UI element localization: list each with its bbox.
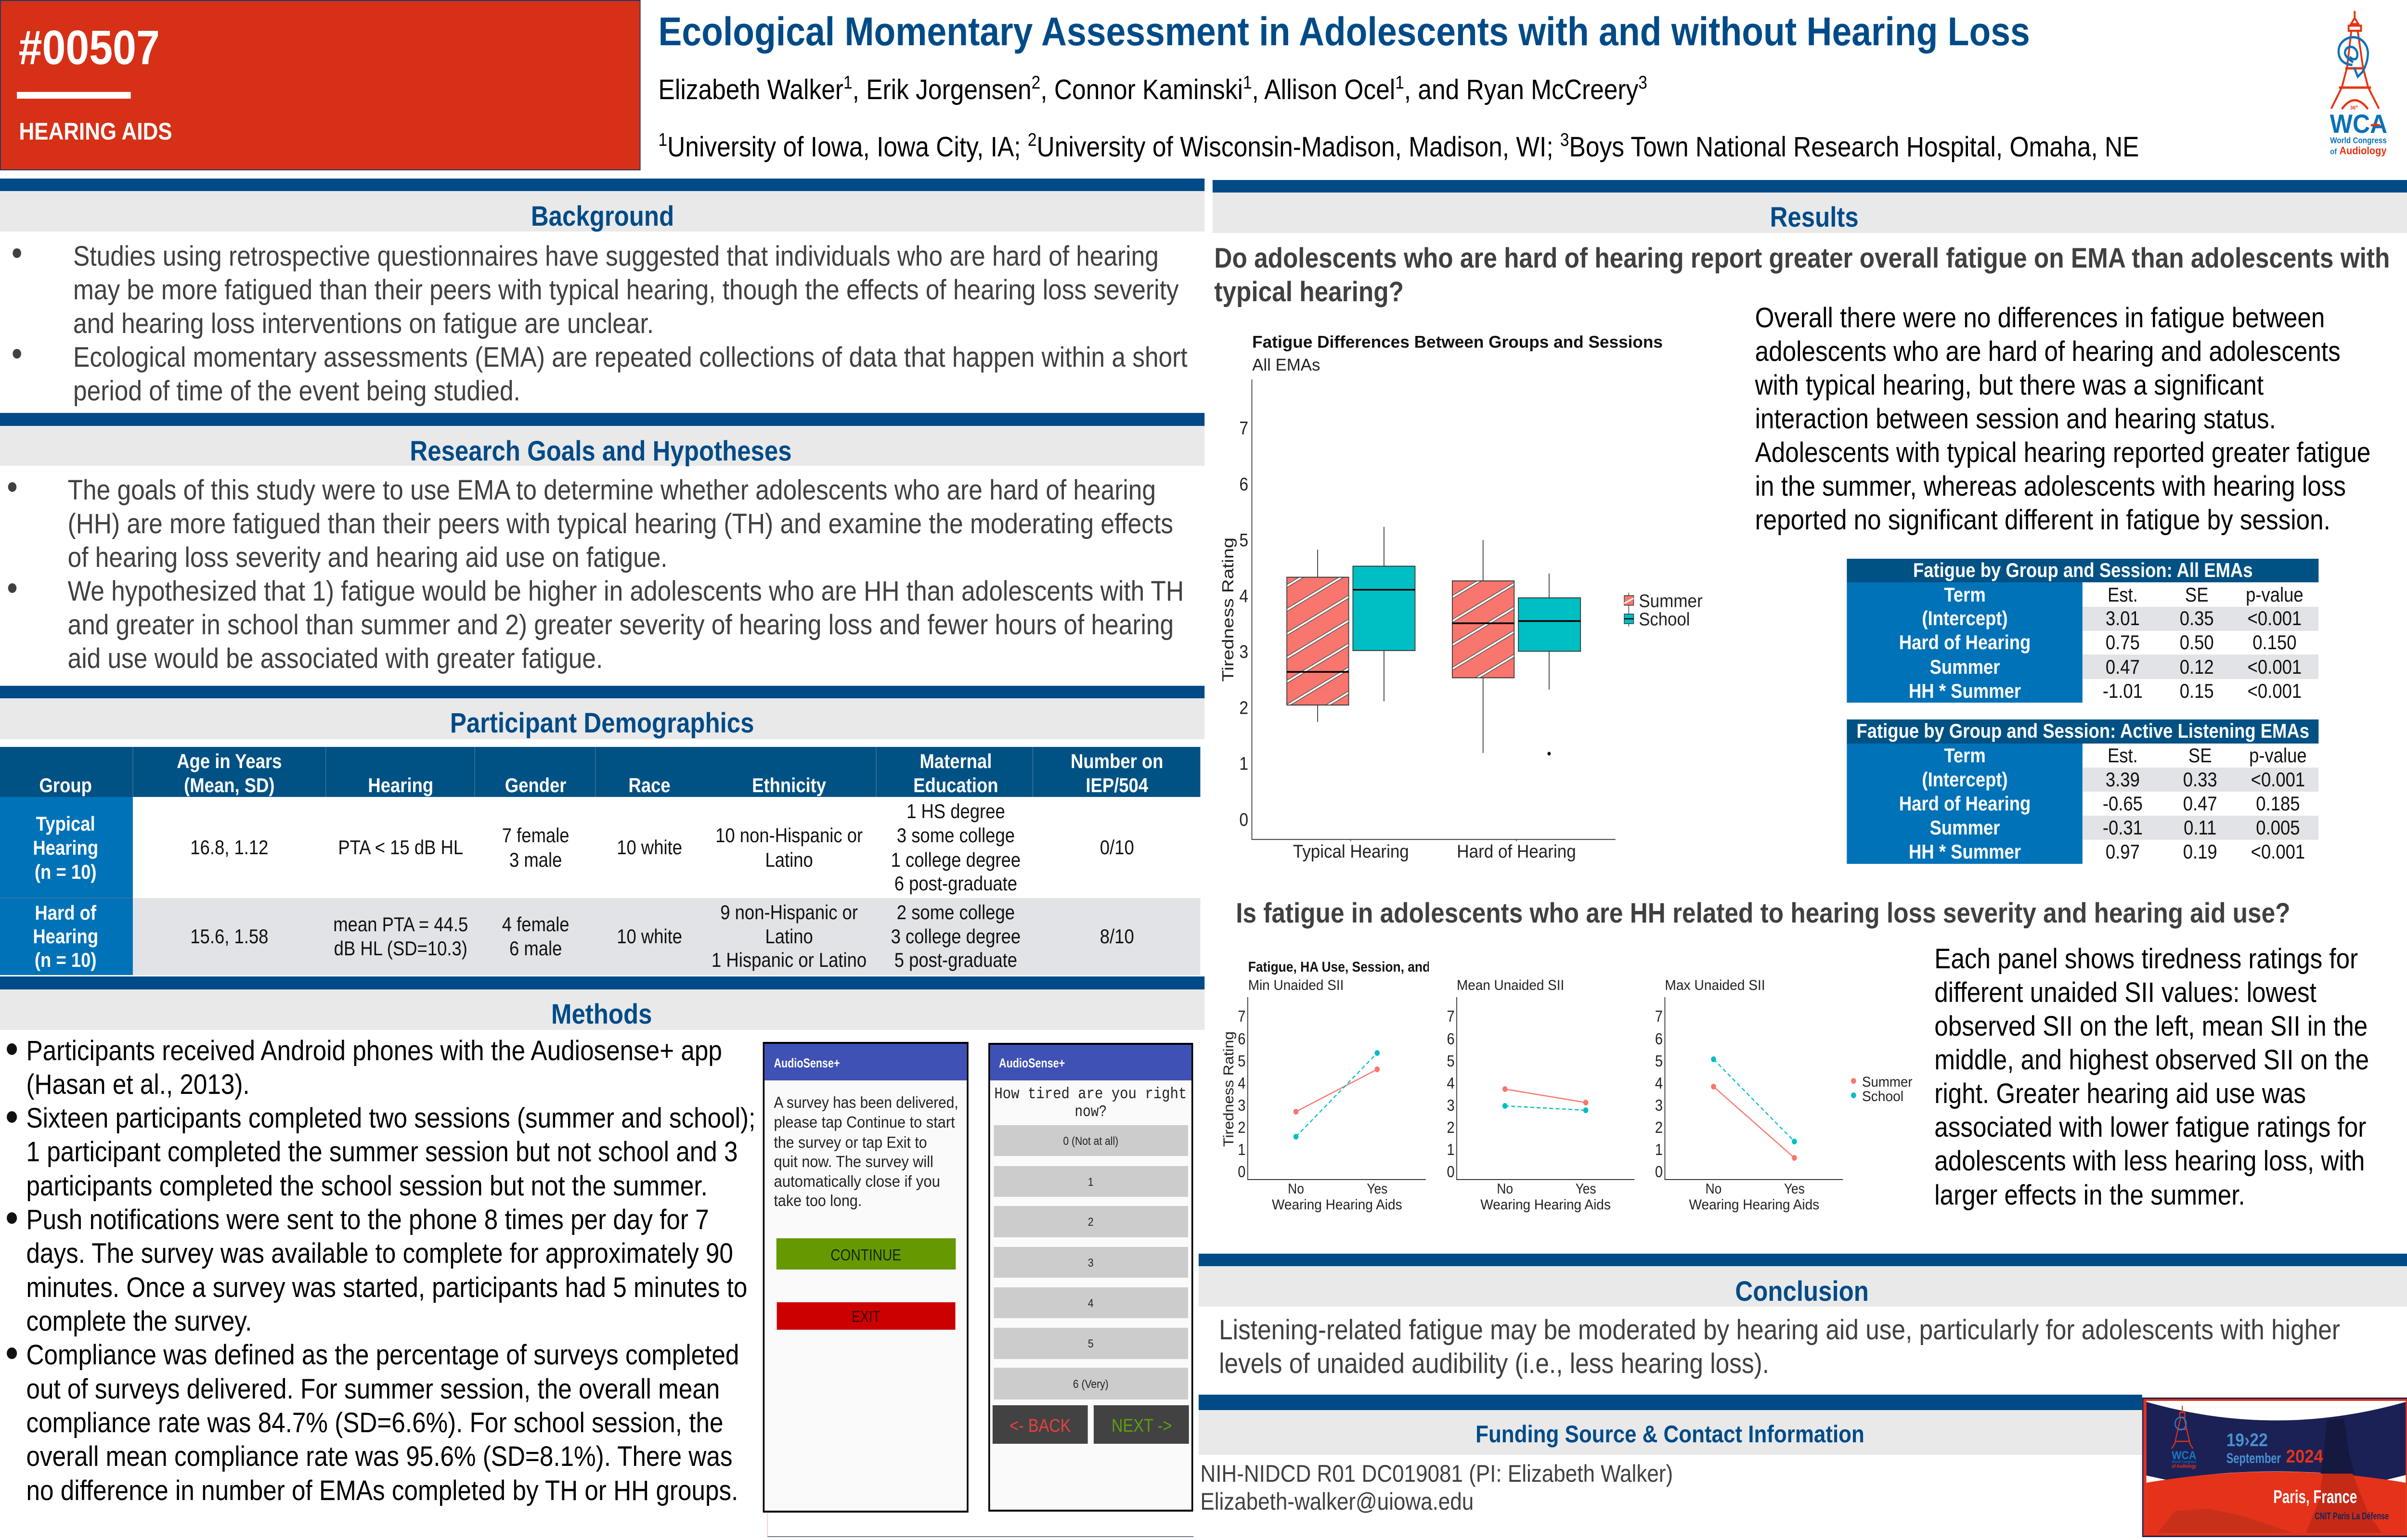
- chart: box plot of fatigue by group and session: School: [1639, 609, 1690, 629]
- phone screenshot: survey delivered: A survey has been delivered,: [774, 1093, 958, 1111]
- table: all EMAs: 0.150: [2252, 632, 2297, 654]
- question 1: typical hearing?: [1214, 276, 1404, 308]
- chart: box plot of fatigue by group and session: [1218, 333, 1703, 861]
- icon: WCA logo: th: [2355, 105, 2358, 108]
- table: demographics: Education: [913, 775, 998, 797]
- affiliations: 2: [1028, 129, 1037, 150]
- chart: fatigue by hearing aid use in three SII panels: Summer: [1862, 1073, 1913, 1090]
- funding text: [1200, 1460, 1673, 1515]
- table: active listening EMAs: 0.005: [2256, 817, 2300, 839]
- results text 2: adolescents with less hearing loss, with: [1934, 1145, 2365, 1177]
- table: all EMAs: HH * Summer: [1909, 680, 2021, 703]
- table: active listening EMAs: 0.47: [2183, 793, 2217, 815]
- table: demographics: Gender: [505, 775, 566, 797]
- table: demographics: mean PTA = 44.5: [333, 914, 468, 936]
- heading: demographics: Participant Demographics: [450, 707, 754, 739]
- methods text: 1 participant completed the summer session but not school and 3: [26, 1136, 738, 1168]
- chart: fatigue by hearing aid use in three SII panels: 7: [1447, 1007, 1455, 1025]
- chart: box plot of fatigue by group and session: 4: [1239, 585, 1248, 606]
- table: demographics: 16.8, 1.12: [190, 837, 268, 859]
- methods text: (Hasan et al., 2013).: [26, 1068, 250, 1100]
- phone screenshot: tiredness question: AudioSense+: [999, 1056, 1065, 1070]
- table: demographics: 10 white: [617, 926, 682, 948]
- methods text: [7, 1035, 755, 1506]
- table: demographics: 1 college degree: [891, 849, 1021, 872]
- chart: fatigue by hearing aid use in three SII panels: 7: [1655, 1007, 1663, 1025]
- results text 1: [1755, 302, 2370, 536]
- results text 2: associated with lower fatigue ratings for: [1934, 1111, 2366, 1143]
- chart: box plot of fatigue by group and session: All EMAs: [1252, 356, 1320, 375]
- research goals text: (HH) are more fatigued than their peers with typical hearing (TH) and examine the moderating effects: [68, 508, 1173, 539]
- heading: methods: Methods: [551, 999, 652, 1030]
- chart: fatigue by hearing aid use in three SII panels: [1220, 958, 1913, 1212]
- chart: fatigue by hearing aid use in three SII panels: 1: [1238, 1141, 1245, 1158]
- methods text: Push notifications were sent to the phone 8 times per day for 7: [26, 1204, 709, 1235]
- chart: fatigue by hearing aid use in three SII panels: 6: [1238, 1030, 1245, 1048]
- chart: fatigue by hearing aid use in three SII panels: 5: [1447, 1052, 1455, 1070]
- table: active listening EMAs: 0.97: [2106, 841, 2140, 863]
- research goals text: [8, 474, 1184, 674]
- chart: box plot of fatigue by group and session: 0: [1239, 809, 1248, 830]
- table: all EMAs: 0.75: [2106, 632, 2140, 654]
- chart: fatigue by hearing aid use in three SII panels: 4: [1447, 1074, 1455, 1092]
- background text: Ecological momentary assessments (EMA) are repeated collections of data that happen within a short: [73, 341, 1188, 373]
- table: demographics: Ethnicity: [752, 775, 826, 797]
- panel: research goals: [0, 413, 1204, 674]
- affiliations: Boys Town National Research Hospital, Omaha, NE: [1569, 131, 2139, 163]
- background text: period of time of the event being studied.: [73, 375, 520, 407]
- table: all EMAs: Fatigue by Group and Session: All EMAs: [1913, 560, 2253, 582]
- phone screenshot: tiredness question: 4: [1088, 1297, 1094, 1309]
- table: all EMAs: 0.15: [2180, 680, 2214, 703]
- chart: fatigue by hearing aid use in three SII panels: 1: [1447, 1141, 1455, 1158]
- table: all EMAs: 0.35: [2180, 608, 2214, 630]
- table: all EMAs: Summer: [1930, 656, 2000, 679]
- table: all EMAs: Term: [1944, 584, 1986, 606]
- table: active listening EMAs: 0.11: [2184, 817, 2216, 839]
- chart: fatigue by hearing aid use in three SII panels: No: [1706, 1180, 1721, 1196]
- panel: methods: [0, 976, 1204, 1506]
- table: demographics: 0/10: [1100, 837, 1134, 859]
- table: all EMAs: 0.47: [2106, 656, 2140, 679]
- authors: 1: [1395, 72, 1404, 92]
- table: demographics: 3 some college: [897, 825, 1015, 847]
- table: demographics: Latino: [765, 849, 813, 872]
- table: all EMAs: 3.01: [2106, 608, 2140, 630]
- phone screenshot: survey delivered: automatically close if you: [774, 1172, 940, 1190]
- chart: fatigue by hearing aid use in three SII panels: Wearing Hearing Aids: [1272, 1196, 1402, 1212]
- phone screenshot: tiredness question: 2: [1088, 1216, 1094, 1228]
- conclusion text: [1219, 1314, 2340, 1379]
- phone screenshot: survey delivered: the survey or tap Exit to: [774, 1133, 927, 1151]
- phone screenshot: tiredness question: 3: [1088, 1257, 1094, 1269]
- research goals text: and greater in school than summer and 2) greater severity of hearing loss and fewer hours of hearing: [68, 609, 1174, 641]
- table: all EMAs: SE: [2185, 584, 2209, 606]
- methods text: Compliance was defined as the percentage of surveys completed: [26, 1339, 739, 1371]
- methods text: minutes. Once a survey was started, participants had 5 minutes to: [26, 1271, 747, 1303]
- table: active listening EMAs: [1847, 719, 2318, 864]
- table: demographics: 10 non-Hispanic or: [715, 825, 863, 847]
- chart: fatigue by hearing aid use in three SII panels: 4: [1655, 1074, 1663, 1092]
- chart: fatigue by hearing aid use in three SII panels: Yes: [1576, 1180, 1596, 1196]
- table: demographics: 3 college degree: [891, 926, 1021, 948]
- icon: WCA logo: of: [2330, 148, 2337, 156]
- badge: poster number and topic: HEARING AIDS: [19, 117, 172, 145]
- methods text: participants completed the school session but not the summer.: [26, 1170, 708, 1202]
- chart: fatigue by hearing aid use in three SII panels: 3: [1655, 1096, 1663, 1114]
- chart: fatigue by hearing aid use in three SII panels: No: [1497, 1180, 1513, 1196]
- authors: , Erik Jorgensen: [853, 74, 1032, 105]
- table: all EMAs: Est.: [2108, 584, 2138, 606]
- results text 1: interaction between session and hearing status.: [1755, 403, 2276, 435]
- results text 1: with typical hearing, but there was a significant: [1755, 369, 2264, 401]
- question 1: [1214, 242, 2390, 308]
- table: active listening EMAs: <0.001: [2251, 841, 2305, 863]
- phone screenshot: tiredness question: now?: [1074, 1103, 1107, 1121]
- conclusion text: levels of unaided audibility (i.e., less hearing loss).: [1219, 1348, 1769, 1379]
- chart: fatigue by hearing aid use in three SII panels: 7: [1238, 1007, 1245, 1025]
- heading: conclusion: Conclusion: [1735, 1276, 1869, 1307]
- chart: fatigue by hearing aid use in three SII panels: 6: [1447, 1030, 1455, 1048]
- table: demographics: Hearing: [33, 837, 98, 860]
- phone screenshot: survey delivered: please tap Continue to start: [774, 1113, 955, 1131]
- research goals text: We hypothesized that 1) fatigue would be higher in adolescents who are HH than adolescents with TH: [68, 575, 1184, 607]
- research goals text: aid use would be associated with greater fatigue.: [68, 642, 603, 674]
- phone screenshot: survey delivered: take too long.: [774, 1192, 862, 1209]
- results text 2: larger effects in the summer.: [1934, 1179, 2245, 1211]
- panel: results: [1213, 180, 2407, 1212]
- banner: WCA Paris 2024: September: [2226, 1450, 2281, 1466]
- methods text: overall mean compliance rate was 95.6% (SD=8.1%). There was: [26, 1440, 732, 1472]
- chart: fatigue by hearing aid use in three SII panels: 3: [1238, 1096, 1245, 1114]
- table: active listening EMAs: <0.001: [2251, 769, 2305, 791]
- phone screenshot: tiredness question: 0 (Not at all): [1063, 1135, 1118, 1147]
- badge: poster number and topic: #00507: [19, 21, 160, 74]
- results text 2: [1934, 943, 2369, 1211]
- table: demographics: 1 HS degree: [906, 801, 1005, 823]
- results text 1: Adolescents with typical hearing reported greater fatigue: [1755, 436, 2370, 468]
- table: demographics: (n = 10): [35, 950, 97, 972]
- phone screenshot: survey delivered: EXIT: [852, 1308, 880, 1325]
- methods text: compliance rate was 84.7% (SD=6.6%). For school session, the: [26, 1407, 723, 1438]
- results text 2: observed SII on the left, mean SII in the: [1934, 1010, 2368, 1042]
- chart: box plot of fatigue by group and session: Tiredness Rating: [1218, 538, 1237, 682]
- table: active listening EMAs: (Intercept): [1922, 769, 2008, 791]
- chart: fatigue by hearing aid use in three SII panels: 3: [1447, 1096, 1455, 1114]
- table: active listening EMAs: 0.33: [2183, 769, 2217, 791]
- authors: Elizabeth Walker: [659, 74, 843, 105]
- chart: fatigue by hearing aid use in three SII panels: Min Unaided SII: [1248, 976, 1344, 993]
- chart: fatigue by hearing aid use in three SII panels: Wearing Hearing Aids: [1480, 1196, 1611, 1212]
- table: active listening EMAs: Summer: [1930, 817, 2000, 839]
- results text 1: reported no significant different in fatigue by session.: [1755, 504, 2330, 536]
- chart: fatigue by hearing aid use in three SII panels: 0: [1238, 1163, 1245, 1181]
- chart: fatigue by hearing aid use in three SII panels: 5: [1655, 1052, 1663, 1070]
- table: active listening EMAs: Term: [1944, 745, 1986, 767]
- phone screenshot: tiredness question: 5: [1088, 1337, 1094, 1350]
- authors: 1: [843, 72, 853, 92]
- affiliations: University of Iowa, Iowa City, IA;: [667, 131, 1028, 163]
- table: demographics: 7 female: [502, 825, 569, 847]
- chart: fatigue by hearing aid use in three SII panels: Yes: [1367, 1180, 1387, 1196]
- table: demographics: Age in Years: [177, 751, 282, 773]
- chart: box plot of fatigue by group and session: Fatigue Differences Between Groups and Sessions: [1252, 333, 1663, 352]
- badge: poster number and topic: [0, 0, 640, 170]
- table: demographics: dB HL (SD=10.3): [334, 938, 467, 960]
- table: active listening EMAs: -0.65: [2103, 793, 2143, 815]
- methods text: Sixteen participants completed two sessions (summer and school);: [26, 1102, 755, 1134]
- affiliations: University of Wisconsin-Madison, Madison, WI;: [1037, 131, 1560, 163]
- table: demographics: Latino: [765, 926, 813, 948]
- methods text: complete the survey.: [26, 1305, 252, 1337]
- table: active listening EMAs: Fatigue by Group and Session: Active Listening EMAs: [1857, 720, 2309, 743]
- heading: results: Results: [1770, 202, 1859, 233]
- research goals text: of hearing loss severity and hearing aid use on fatigue.: [68, 541, 668, 573]
- table: demographics: 10 white: [617, 837, 682, 859]
- chart: fatigue by hearing aid use in three SII panels: 6: [1655, 1030, 1663, 1048]
- authors: , Connor Kaminski: [1040, 74, 1243, 105]
- phone screenshot: survey delivered: quit now. The survey will: [774, 1153, 933, 1170]
- panel: background: [0, 179, 1204, 407]
- chart: box plot of fatigue by group and session: Hard of Hearing: [1457, 841, 1576, 861]
- results text 1: Overall there were no differences in fatigue between: [1755, 302, 2325, 334]
- table: demographics: (n = 10): [35, 861, 97, 884]
- icon: WCA logo: [2330, 11, 2387, 157]
- table: demographics: 6 male: [509, 938, 562, 960]
- results text 2: middle, and highest observed SII on the: [1934, 1044, 2369, 1076]
- table: active listening EMAs: -0.31: [2103, 817, 2143, 839]
- banner: WCA Paris 2024: WCA: [2172, 1449, 2196, 1462]
- table: demographics: Group: [39, 775, 92, 797]
- table: demographics: 1 Hispanic or Latino: [712, 950, 867, 972]
- authors: 2: [1032, 72, 1040, 92]
- heading: funding: Funding Source & Contact Information: [1475, 1420, 1864, 1448]
- chart: fatigue by hearing aid use in three SII panels: Wearing Hearing Aids: [1689, 1196, 1819, 1212]
- table: demographics: IEP/504: [1086, 775, 1148, 797]
- table: all EMAs: <0.001: [2248, 680, 2302, 703]
- chart: box plot of fatigue by group and session: 6: [1239, 474, 1248, 494]
- banner: WCA Paris 2024: [2142, 1398, 2407, 1537]
- table: active listening EMAs: 3.39: [2106, 769, 2140, 791]
- background text: [13, 240, 1188, 407]
- chart: box plot of fatigue by group and session: 5: [1239, 529, 1248, 551]
- background text: and hearing loss interventions on fatigue are unclear.: [73, 308, 654, 339]
- affiliations: 3: [1560, 129, 1569, 150]
- chart: box plot of fatigue by group and session: Typical Hearing: [1293, 841, 1409, 861]
- background text: may be more fatigued than their peers with typical hearing, though the effects of hearing loss severity: [73, 274, 1179, 306]
- table: demographics: Hearing: [368, 775, 433, 797]
- table: demographics: Maternal: [919, 751, 992, 773]
- table: demographics: 2 some college: [897, 902, 1015, 924]
- authors: 1: [1243, 72, 1252, 92]
- phone screenshot: tiredness question: NEXT ->: [1112, 1415, 1172, 1436]
- table: demographics: Hearing: [33, 926, 98, 948]
- table: demographics: Race: [629, 775, 671, 797]
- table: active listening EMAs: p-value: [2249, 745, 2307, 767]
- panel: funding and contact: [1199, 1395, 2142, 1515]
- phone screenshot: tiredness question: How tired are you right: [994, 1085, 1187, 1104]
- heading: background: Background: [531, 201, 674, 232]
- chart: fatigue by hearing aid use in three SII panels: 4: [1238, 1074, 1245, 1092]
- icon: WCA logo: 36: [2350, 105, 2355, 111]
- funding text: Elizabeth-walker@uiowa.edu: [1200, 1488, 1474, 1515]
- chart: box plot of fatigue by group and session: Summer: [1639, 590, 1703, 611]
- chart: fatigue by hearing aid use in three SII panels: 0: [1655, 1163, 1663, 1181]
- background text: Studies using retrospective questionnaires have suggested that individuals who are hard of hearing: [73, 240, 1159, 272]
- table: demographics: (Mean, SD): [184, 775, 275, 797]
- table: all EMAs: p-value: [2246, 584, 2303, 606]
- chart: fatigue by hearing aid use in three SII panels: No: [1288, 1180, 1304, 1196]
- table: all EMAs: -1.01: [2103, 680, 2143, 703]
- chart: fatigue by hearing aid use in three SII panels: Yes: [1784, 1180, 1805, 1196]
- phone screenshot: survey delivered: [764, 1043, 968, 1512]
- table: all EMAs: <0.001: [2248, 608, 2302, 630]
- conclusion text: Listening-related fatigue may be moderated by hearing aid use, particularly for adolescents with higher: [1219, 1314, 2340, 1346]
- table: active listening EMAs: HH * Summer: [1909, 841, 2021, 863]
- methods text: no difference in number of EMAs completed by TH or HH groups.: [26, 1475, 738, 1506]
- banner: WCA Paris 2024: CNIT Paris La Défense: [2315, 1511, 2389, 1521]
- methods text: out of surveys delivered. For summer session, the overall mean: [26, 1373, 720, 1405]
- table: all EMAs: Hard of Hearing: [1899, 632, 2031, 654]
- results text 2: Each panel shows tiredness ratings for: [1934, 943, 2358, 975]
- table: all EMAs: [1847, 559, 2318, 703]
- chart: fatigue by hearing aid use in three SII panels: 5: [1238, 1052, 1245, 1070]
- table: demographics: 9 non-Hispanic or: [720, 902, 858, 924]
- phone screenshot: tiredness question: [989, 1044, 1192, 1511]
- table: demographics: Typical: [36, 813, 95, 835]
- table: demographics: 4 female: [502, 914, 569, 936]
- title: Ecological Momentary Assessment in Adolescents with and without Hearing Loss: [659, 9, 2030, 54]
- chart: fatigue by hearing aid use in three SII panels: Tiredness Rating: [1220, 1031, 1236, 1147]
- table: all EMAs: 0.12: [2180, 656, 2214, 679]
- chart: box plot of fatigue by group and session: 2: [1239, 697, 1248, 718]
- table: demographics: 3 male: [509, 849, 562, 872]
- chart: fatigue by hearing aid use in three SII panels: 2: [1238, 1118, 1245, 1136]
- phone screenshot: tiredness question: 6 (Very): [1073, 1378, 1109, 1390]
- banner: WCA Paris 2024: of Audiology: [2172, 1464, 2197, 1469]
- chart: fatigue by hearing aid use in three SII panels: Max Unaided SII: [1665, 976, 1765, 993]
- chart: fatigue by hearing aid use in three SII panels: Mean Unaided SII: [1457, 976, 1564, 993]
- results text 1: adolescents who are hard of hearing and adolescents: [1755, 335, 2341, 367]
- methods text: Participants received Android phones with the Audiosense+ app: [26, 1035, 722, 1066]
- panel: demographics: [0, 686, 1204, 975]
- chart: box plot of fatigue by group and session: 3: [1239, 641, 1248, 662]
- icon: WCA logo: WCA: [2330, 109, 2387, 139]
- table: active listening EMAs: 0.185: [2256, 793, 2300, 815]
- banner: WCA Paris 2024: Paris, France: [2273, 1487, 2357, 1507]
- authors: , Allison Ocel: [1252, 74, 1395, 105]
- banner: WCA Paris 2024: 19›22: [2226, 1430, 2268, 1450]
- table: demographics: 8/10: [1100, 926, 1134, 948]
- results text 2: different unaided SII values: lowest: [1934, 976, 2316, 1008]
- phone screenshot: tiredness question: <- BACK: [1009, 1415, 1071, 1436]
- question 1: Do adolescents who are hard of hearing report greater overall fatigue on EMA than adolescents with: [1214, 242, 2390, 274]
- chart: box plot of fatigue by group and session: 7: [1239, 417, 1248, 438]
- table: demographics: 15.6, 1.58: [190, 926, 268, 948]
- table: demographics: 5 post-graduate: [894, 950, 1017, 972]
- table: all EMAs: <0.001: [2248, 656, 2302, 679]
- banner: WCA Paris 2024: World Congress: [2172, 1460, 2197, 1464]
- table: demographics: 6 post-graduate: [894, 873, 1017, 895]
- results text 1: in the summer, whereas adolescents with hearing loss: [1755, 470, 2346, 502]
- table: active listening EMAs: SE: [2188, 745, 2212, 767]
- question 2: Is fatigue in adolescents who are HH related to hearing loss severity and hearing aid use?: [1236, 897, 2290, 929]
- affiliations: 1: [659, 129, 667, 150]
- phone screenshot: survey delivered: AudioSense+: [774, 1056, 840, 1070]
- research goals text: The goals of this study were to use EMA to determine whether adolescents who are hard of hearing: [68, 474, 1156, 506]
- panel: conclusion: [1199, 1254, 2407, 1379]
- heading: research goals: Research Goals and Hypotheses: [410, 436, 792, 467]
- authors: , and Ryan McCreery: [1404, 74, 1639, 105]
- phone screenshot: tiredness question: 1: [1088, 1176, 1094, 1188]
- chart: fatigue by hearing aid use in three SII panels: 2: [1655, 1118, 1663, 1136]
- table: active listening EMAs: Hard of Hearing: [1899, 793, 2031, 815]
- table: active listening EMAs: Est.: [2108, 745, 2138, 767]
- chart: fatigue by hearing aid use in three SII panels: Fatigue, HA Use, Session, and Unaided SII: [1248, 958, 1503, 975]
- methods text: days. The survey was available to complete for approximately 90: [26, 1237, 733, 1269]
- chart: fatigue by hearing aid use in three SII panels: 1: [1655, 1141, 1663, 1158]
- table: demographics: PTA < 15 dB HL: [338, 837, 463, 859]
- chart: box plot of fatigue by group and session: 1: [1239, 753, 1248, 774]
- results text 2: right. Greater hearing aid use was: [1934, 1078, 2306, 1109]
- table: all EMAs: (Intercept): [1922, 608, 2008, 630]
- chart: fatigue by hearing aid use in three SII panels: 2: [1447, 1118, 1455, 1136]
- table: demographics: Number on: [1071, 751, 1163, 773]
- table: active listening EMAs: 0.19: [2183, 841, 2217, 863]
- phone screenshot: survey delivered: CONTINUE: [830, 1246, 901, 1264]
- chart: fatigue by hearing aid use in three SII panels: School: [1862, 1088, 1903, 1104]
- table: all EMAs: 0.50: [2180, 632, 2214, 654]
- chart: fatigue by hearing aid use in three SII panels: 0: [1447, 1163, 1455, 1181]
- icon: WCA logo: World Congress: [2330, 136, 2387, 145]
- table: demographics: Hard of: [35, 902, 97, 924]
- icon: WCA logo: Audiology: [2340, 145, 2387, 157]
- banner: WCA Paris 2024: 2024: [2286, 1446, 2323, 1466]
- authors: 3: [1638, 72, 1647, 92]
- table: demographics: [0, 747, 1200, 975]
- funding text: NIH-NIDCD R01 DC019081 (PI: Elizabeth Walker): [1200, 1460, 1673, 1487]
